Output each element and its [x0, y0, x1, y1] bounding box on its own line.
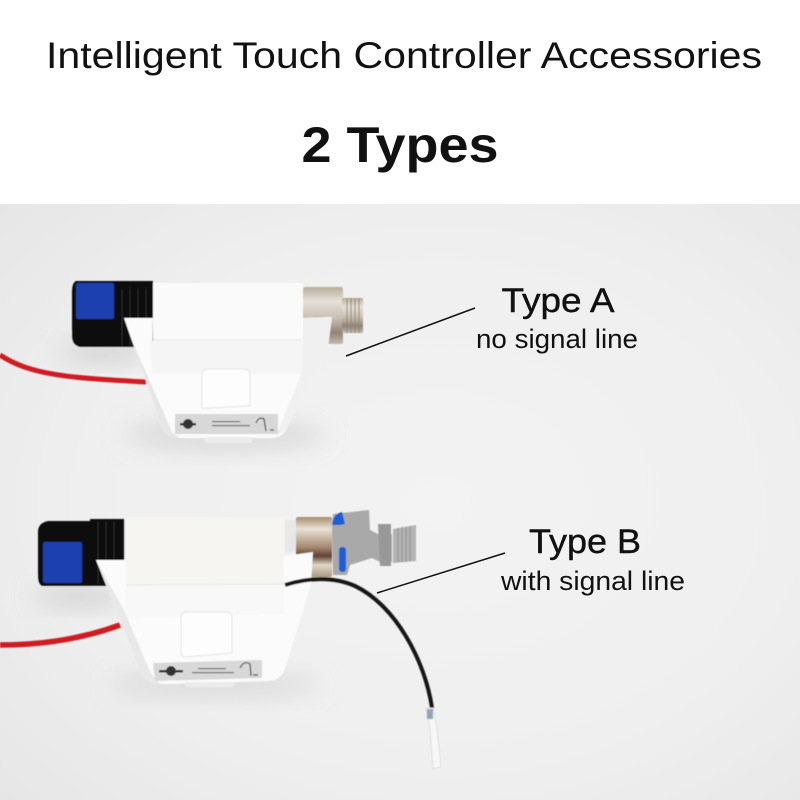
black knob with blue cap	[72, 281, 153, 347]
product label	[175, 414, 278, 434]
red wire	[0, 625, 120, 645]
product label	[153, 660, 262, 681]
black knob with blue cap	[38, 519, 124, 586]
metal connector	[303, 287, 363, 344]
label: Type A: no signal line	[476, 324, 638, 354]
title: Intelligent Touch Controller Accessories	[46, 35, 762, 76]
red wire	[0, 355, 146, 382]
leader line: Type B	[377, 553, 505, 593]
leader line: Type A	[346, 308, 475, 356]
photo background panel	[0, 204, 800, 800]
white housing	[124, 283, 332, 443]
white housing	[96, 517, 313, 687]
signal wire terminal	[426, 708, 441, 769]
label: Type B: with signal line	[500, 566, 685, 596]
label: Type A: Type A	[502, 282, 615, 320]
label: Type B	[500, 523, 685, 596]
label: Type A	[476, 282, 638, 354]
metal connector and grey valve	[285, 510, 416, 577]
device: Type A	[0, 281, 363, 449]
subtitle: 2 Types: 2 Types	[302, 117, 498, 173]
black signal wire	[285, 579, 432, 708]
device: Type B	[0, 510, 441, 769]
label: Type B: Type B	[529, 523, 641, 561]
